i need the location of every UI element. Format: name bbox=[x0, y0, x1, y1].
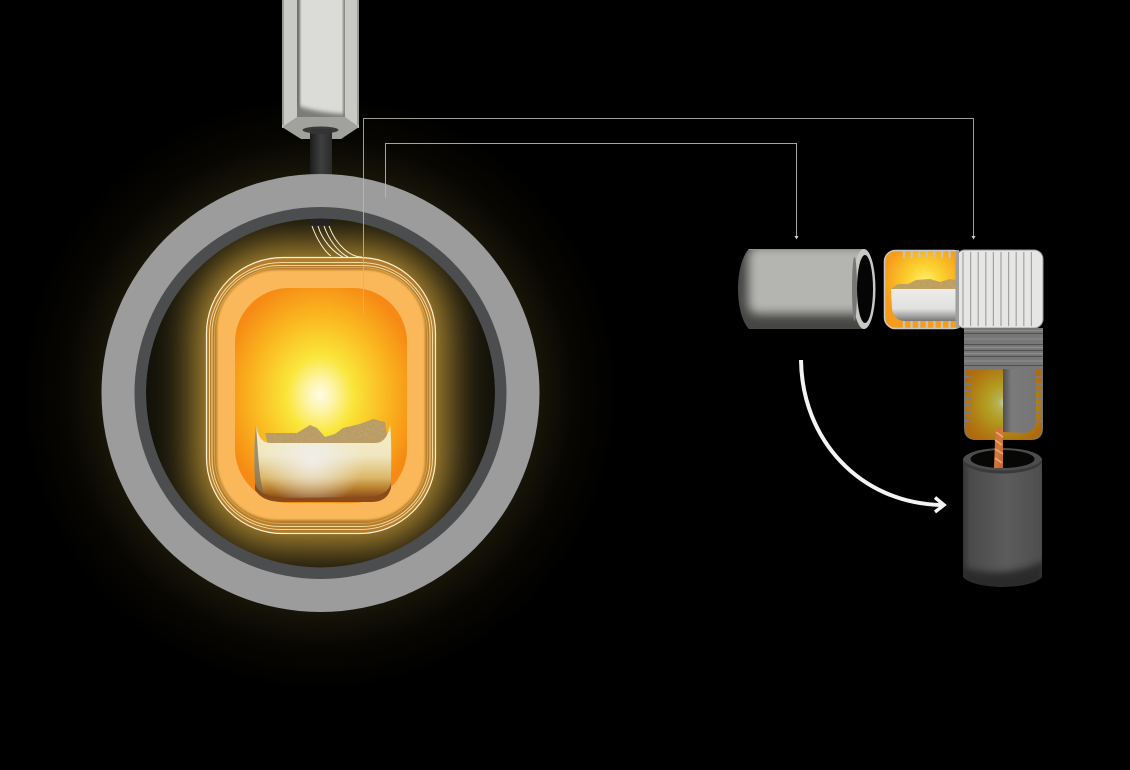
induction coil connector bbox=[309, 219, 331, 225]
crucible shadow bbox=[255, 480, 391, 502]
furnace chamber glow bbox=[146, 218, 495, 568]
leader arrowheads bbox=[794, 236, 976, 240]
sand bbox=[891, 279, 956, 290]
crucible body bbox=[254, 425, 391, 498]
heated lining bbox=[217, 270, 425, 520]
vertical furnace: coil windings bbox=[964, 328, 1043, 369]
crucible bbox=[1003, 369, 1036, 433]
furnace dark inner ring bbox=[134, 207, 506, 579]
horizontal furnace: coil windings bbox=[956, 250, 1043, 328]
coil stubs bbox=[904, 251, 950, 328]
vertical furnace: cutaway bbox=[964, 369, 1042, 440]
crucible bbox=[891, 289, 956, 321]
coil stubs bbox=[965, 377, 1042, 421]
outer glow halo bbox=[20, 93, 620, 693]
furnace outer ring bbox=[102, 174, 540, 612]
leader line to tube bbox=[386, 144, 796, 236]
horizontal furnace: cutaway bbox=[884, 250, 964, 328]
leader line to coil bbox=[364, 118, 974, 315]
insulating tube bbox=[738, 249, 876, 329]
crucible with material bbox=[254, 419, 391, 502]
induction coil loops bbox=[206, 258, 436, 534]
hex collar bbox=[282, 117, 359, 139]
molten core bbox=[235, 288, 407, 503]
induction coil wires bbox=[312, 226, 362, 257]
tube mouth bbox=[852, 249, 876, 329]
connecting stem bbox=[302, 126, 338, 178]
feed tube bbox=[282, 0, 359, 139]
process arrow bbox=[801, 360, 944, 512]
infographic: furnace diagram bbox=[68, 0, 1044, 646]
sand bbox=[265, 419, 387, 445]
molten stream bbox=[994, 427, 1003, 468]
collecting vessel bbox=[963, 448, 1042, 587]
